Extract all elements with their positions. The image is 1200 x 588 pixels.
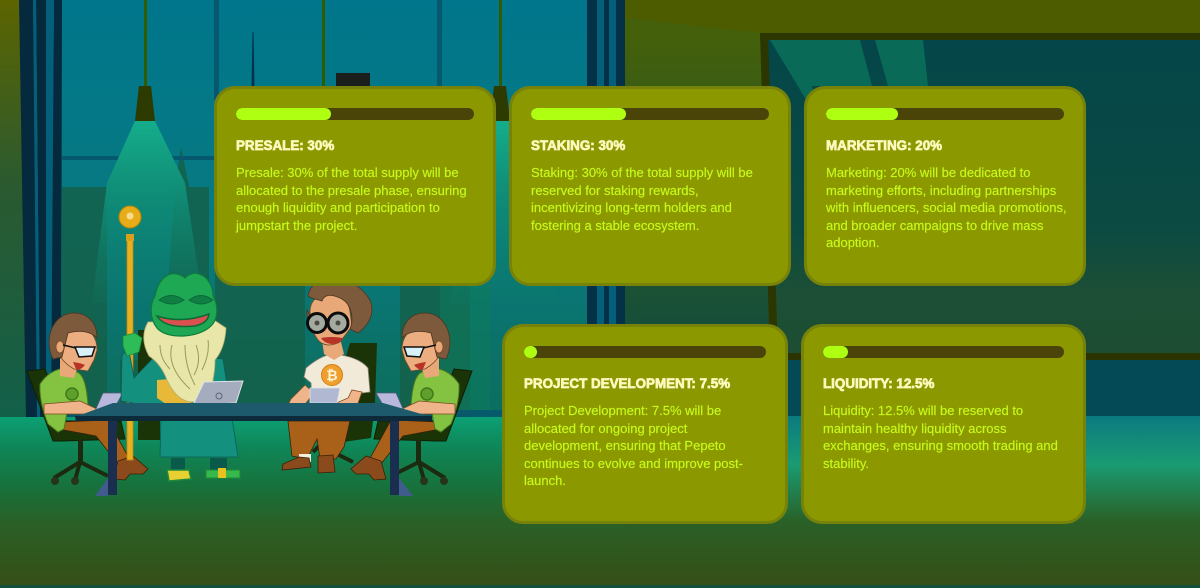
text: liquidity description: stability. — [823, 456, 869, 471]
text: liquidity description: Liquidity: 12.5% will be reserved to — [823, 403, 1023, 418]
professor with bitcoin shirt: ₿ — [326, 367, 338, 383]
professor with bitcoin shirt — [282, 278, 377, 473]
text: presale description: Presale: 30% of the total supply will be — [236, 165, 459, 180]
text: staking description: incentivizing long-term holders and — [531, 200, 732, 215]
progress bar: marketing 20% — [826, 108, 1064, 120]
panel: project development — [502, 324, 788, 524]
panel: marketing — [804, 86, 1086, 286]
text: project development description: launch. — [524, 473, 566, 488]
heading: presale: PRESALE: 30% — [236, 138, 334, 153]
right man with laptop — [351, 313, 472, 485]
lamp light cones — [92, 121, 558, 303]
text: marketing description: and broader campaigns to drive mass — [826, 218, 1044, 233]
text: marketing description: marketing efforts, including partnerships — [826, 183, 1056, 198]
heading: liquidity: LIQUIDITY: 12.5% — [823, 376, 934, 391]
panel: liquidity — [801, 324, 1086, 524]
text: marketing description — [826, 165, 1067, 250]
text: staking description: Staking: 30% of the total supply will be — [531, 165, 753, 180]
text: project development description: allocated for ongoing project — [524, 421, 687, 436]
text: project development description: Project Development: 7.5% will be — [524, 403, 721, 418]
text: staking description: reserved for staking rewards, — [531, 183, 699, 198]
text: staking description: fostering a stable ecosystem. — [531, 218, 699, 233]
text: liquidity description: maintain healthy liquidity across — [823, 421, 1007, 436]
progress bar: presale 30% — [236, 108, 474, 120]
text: staking description — [531, 165, 753, 233]
heading: staking: STAKING: 30% — [531, 138, 625, 153]
text: liquidity description — [823, 403, 1058, 471]
text: presale description: allocated to the presale phase, ensuring — [236, 183, 467, 198]
text: marketing description: Marketing: 20% will be dedicated to — [826, 165, 1031, 180]
panel: presale — [214, 86, 496, 286]
text: presale description: jumpstart the project. — [236, 218, 357, 233]
text: presale description: enough liquidity and participation to — [236, 200, 440, 215]
progress bar: liquidity 12.5% — [823, 346, 1064, 358]
progress bar: project development 7.5% — [524, 346, 766, 358]
heading: marketing: MARKETING: 20% — [826, 138, 942, 153]
text: project development description: continues to evolve and improve post- — [524, 456, 743, 471]
text: presale description — [236, 165, 467, 233]
progress bar: staking 30% — [531, 108, 769, 120]
pepe wizard with staff — [119, 206, 243, 481]
text: project development description: development, ensuring that Pepeto — [524, 438, 726, 453]
left man with laptop — [27, 313, 148, 485]
text: marketing description: with influencers, social media promotions, — [826, 200, 1067, 215]
panel: staking — [509, 86, 791, 286]
table — [75, 403, 432, 496]
text: marketing description: adoption. — [826, 235, 880, 250]
text: project development description — [524, 403, 743, 488]
text: liquidity description: exchanges, ensuring smooth trading and — [823, 438, 1058, 453]
heading: project development: PROJECT DEVELOPMENT: 7.5% — [524, 376, 730, 391]
